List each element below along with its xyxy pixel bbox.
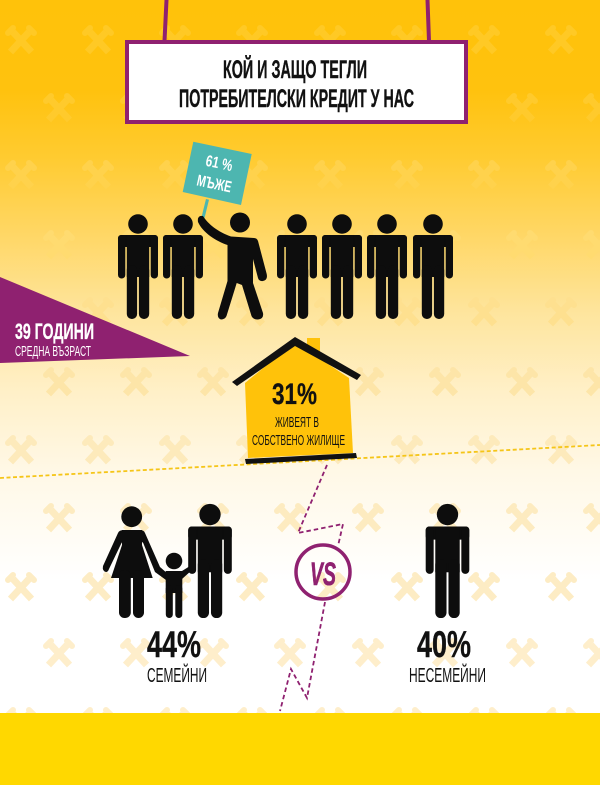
house: [232, 337, 361, 464]
bottom yellow band: [0, 713, 600, 785]
VS badge: [296, 545, 350, 599]
single person icon: [426, 504, 469, 618]
stat: single: 40%: [417, 624, 471, 665]
title text: КОЙ И ЗАЩО ТЕГЛИ: [223, 54, 367, 84]
dashed yellow line: [0, 445, 600, 478]
title text: [179, 54, 414, 113]
title sign: [127, 0, 466, 122]
age banner: 39 ГОДИНИ: [15, 319, 94, 344]
VS badge: VS: [310, 556, 336, 592]
sign: 61% men: [183, 142, 252, 218]
age banner: СРЕДНА ВЪЗРАСТ: [15, 343, 91, 360]
house: СОБСТВЕНО ЖИЛИЩЕ: [252, 432, 345, 449]
stat: single: [409, 624, 486, 687]
stat: married: 44%: [147, 624, 201, 665]
sign: 61% men: МЪЖЕ: [195, 173, 233, 196]
age banner: [0, 277, 190, 363]
dashed lightning line: [298, 465, 343, 546]
stat: married: СЕМЕЙНИ: [147, 663, 207, 687]
family icon: [103, 504, 232, 618]
house: 31%: [272, 378, 317, 411]
row of people: [118, 212, 453, 320]
sign: 61% men: 61 %: [204, 153, 234, 175]
title text: ПОТРЕБИТЕЛСКИ КРЕДИТ У НАС: [179, 85, 414, 113]
stat: married: [147, 624, 207, 687]
stat: single: НЕСЕМЕЙНИ: [409, 663, 486, 687]
house: ЖИВЕЯТ В: [275, 414, 319, 431]
raised-arm person: [198, 212, 267, 320]
